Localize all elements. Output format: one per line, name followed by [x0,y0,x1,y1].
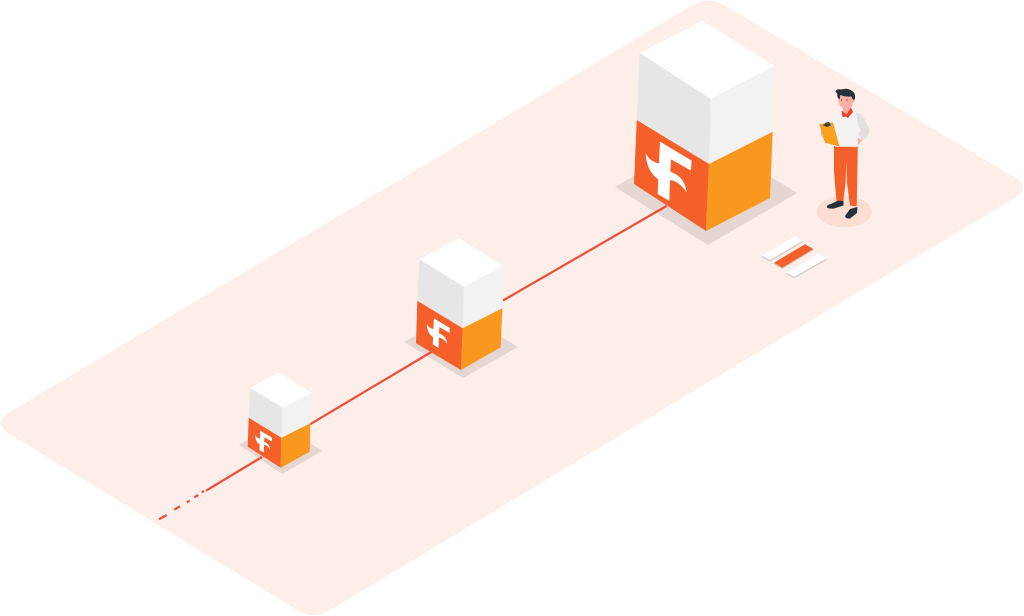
small block [248,372,312,468]
growth line [159,206,666,519]
hair [836,89,855,100]
trousers [834,146,858,206]
neck [843,105,851,114]
block shadows [239,135,797,474]
collar [842,108,853,118]
eyes [841,99,848,101]
large logo [646,142,692,201]
shoes [827,200,858,219]
shirt [830,112,858,147]
striped card [762,236,827,278]
person [817,89,872,227]
ground ellipse [817,196,872,227]
medium logo [427,318,450,348]
large block [634,21,775,231]
ear [850,98,855,103]
small logo [255,431,272,453]
right sleeve [855,112,870,141]
face [838,95,852,110]
right hand [848,137,862,148]
clipboard [819,122,840,146]
medium block [416,238,504,370]
clipboard arm [821,130,829,141]
clipboard clip [823,122,831,127]
